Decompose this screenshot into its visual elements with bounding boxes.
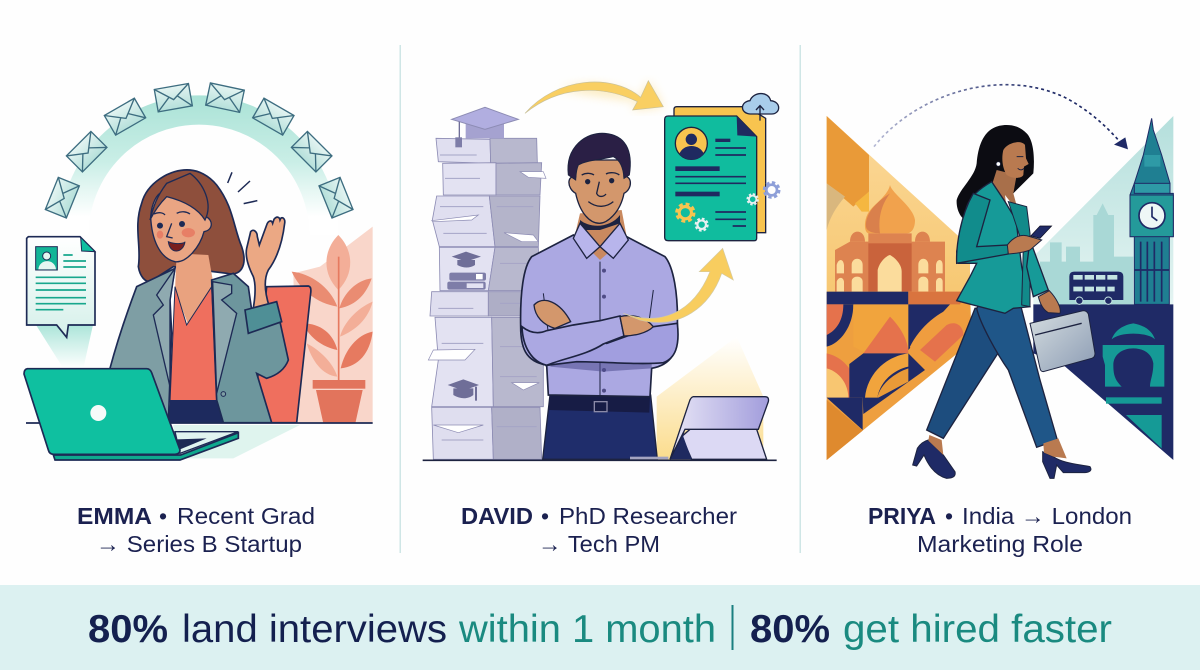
- placket: [543, 262, 653, 395]
- caption line 1: PRIYA: [868, 503, 936, 529]
- blouse: [170, 287, 217, 402]
- face: [151, 192, 211, 262]
- hand on briefcase: [1038, 291, 1060, 313]
- floor line: [423, 458, 777, 463]
- upper forearm: [522, 316, 624, 365]
- plant: [292, 235, 373, 423]
- panel: Emma illustration: [24, 83, 373, 460]
- Big Ben base emblem: [1103, 308, 1164, 448]
- trousers: [543, 395, 657, 459]
- forearm: [957, 193, 1008, 263]
- stat one: [88, 608, 716, 651]
- panel divider left: [400, 45, 401, 553]
- belt: [548, 395, 650, 413]
- laptop: [24, 369, 238, 460]
- arrow head: [1114, 137, 1128, 149]
- face: [569, 160, 630, 223]
- graduation cap top: [452, 107, 518, 147]
- stat two: 80%: [750, 608, 830, 651]
- terracotta bar: [908, 292, 967, 304]
- shirt shadow under arms: [550, 353, 652, 372]
- left triangle top: [827, 116, 970, 292]
- arm with briefcase: [1027, 240, 1048, 297]
- chair: [253, 286, 311, 423]
- left geometric base: [827, 292, 972, 460]
- lower arm: [547, 323, 678, 365]
- stat one: 80%: [88, 608, 168, 651]
- briefcase: [1030, 306, 1095, 372]
- stats banner: [0, 585, 1200, 670]
- small caps and books: [447, 252, 486, 401]
- lower glow: [657, 337, 763, 460]
- phone: [1031, 226, 1052, 238]
- plant backdrop: [293, 227, 373, 423]
- facial features: [582, 173, 619, 206]
- London skyline: [1040, 203, 1133, 304]
- Taj body: [835, 232, 945, 292]
- caption line 1: EMMA: [77, 503, 152, 529]
- desk line: [26, 420, 373, 425]
- caption: David: [461, 503, 737, 557]
- caption line 1: [868, 503, 1132, 529]
- right triangle sky: [1033, 116, 1173, 304]
- front ankle: [1043, 438, 1067, 458]
- panel divider right: [800, 45, 801, 553]
- phone hand: [1007, 235, 1042, 254]
- back ankle: [928, 435, 943, 455]
- paper stack: [428, 138, 546, 459]
- cloud upload icon: [742, 94, 779, 121]
- caption line 1: DAVID: [461, 503, 533, 529]
- stat one: land interviews: [182, 608, 447, 651]
- tablet: [630, 397, 769, 459]
- caption line 2: → Series B Startup: [96, 531, 302, 557]
- stat one: within 1 month: [458, 608, 716, 651]
- side gears: [748, 183, 778, 204]
- back leg: [927, 307, 1020, 438]
- Taj dome: [865, 185, 915, 233]
- resume bubble: [27, 237, 95, 368]
- buttons: [602, 269, 606, 393]
- face features: [154, 212, 195, 251]
- caption line 1: •: [541, 503, 549, 529]
- Big Ben tower: [1130, 118, 1173, 304]
- jacket button: [221, 392, 226, 396]
- raised hand: [246, 217, 285, 313]
- trousers: [168, 400, 223, 423]
- front leg: [977, 290, 1057, 447]
- ochre curve: [827, 183, 845, 230]
- white blouse: [1005, 195, 1028, 267]
- excited marks: [228, 172, 257, 204]
- London bus: [1069, 272, 1123, 304]
- desk shadow: [173, 425, 300, 458]
- geometric tiles: [827, 304, 972, 460]
- navy bar: [827, 292, 908, 304]
- hand right: [620, 316, 653, 336]
- lapels: [153, 268, 237, 393]
- jacket: [957, 182, 1030, 313]
- caption line 1: •: [159, 503, 167, 529]
- hair: [568, 133, 630, 180]
- stat two: get hired faster: [843, 608, 1112, 651]
- caption line 1: •: [945, 503, 953, 529]
- caption line 1: Recent Grad: [177, 503, 315, 529]
- envelopes: [45, 83, 353, 218]
- back shoe: [913, 440, 955, 478]
- beard shadow: [580, 215, 620, 230]
- hand left: [534, 300, 571, 328]
- top arrow: [525, 81, 663, 113]
- hair fringe: [150, 173, 208, 220]
- separator: [732, 605, 734, 650]
- panel: Priya illustration: [827, 85, 1173, 478]
- caption line 2: → Tech PM: [538, 531, 660, 557]
- neck: [993, 170, 1018, 212]
- hair: [957, 125, 1034, 220]
- lower arrow: [623, 248, 733, 322]
- face: [1002, 142, 1029, 178]
- right lapel: [1008, 202, 1030, 307]
- jacket right: [212, 273, 288, 423]
- neck: [575, 210, 627, 260]
- caption line 1: [461, 503, 737, 529]
- sleeve cuff: [245, 302, 282, 333]
- panel: David illustration: [423, 81, 779, 460]
- neck: [175, 253, 213, 325]
- caption line 2: Marketing Role: [917, 531, 1083, 557]
- collar: [573, 223, 628, 258]
- facial line: [1017, 157, 1024, 170]
- caption line 1: PhD Researcher: [559, 503, 737, 529]
- banner background: [0, 585, 1200, 670]
- caption: Priya: [868, 503, 1132, 557]
- orange corner: [827, 116, 869, 207]
- earring: [996, 162, 1000, 166]
- jacket left: [110, 268, 175, 423]
- caption line 1: [77, 503, 315, 529]
- gold curve: [855, 192, 869, 212]
- resume folder back: [674, 107, 766, 233]
- right ground: [1033, 304, 1173, 460]
- shirt torso: [521, 235, 678, 397]
- resume document: [665, 116, 757, 241]
- front shoe: [1043, 452, 1091, 478]
- email arc band: [74, 110, 324, 235]
- caption: Emma: [77, 503, 315, 557]
- caption line 1: India → London: [962, 503, 1132, 529]
- hair: [138, 170, 244, 282]
- dashed flight arc: [874, 85, 1118, 147]
